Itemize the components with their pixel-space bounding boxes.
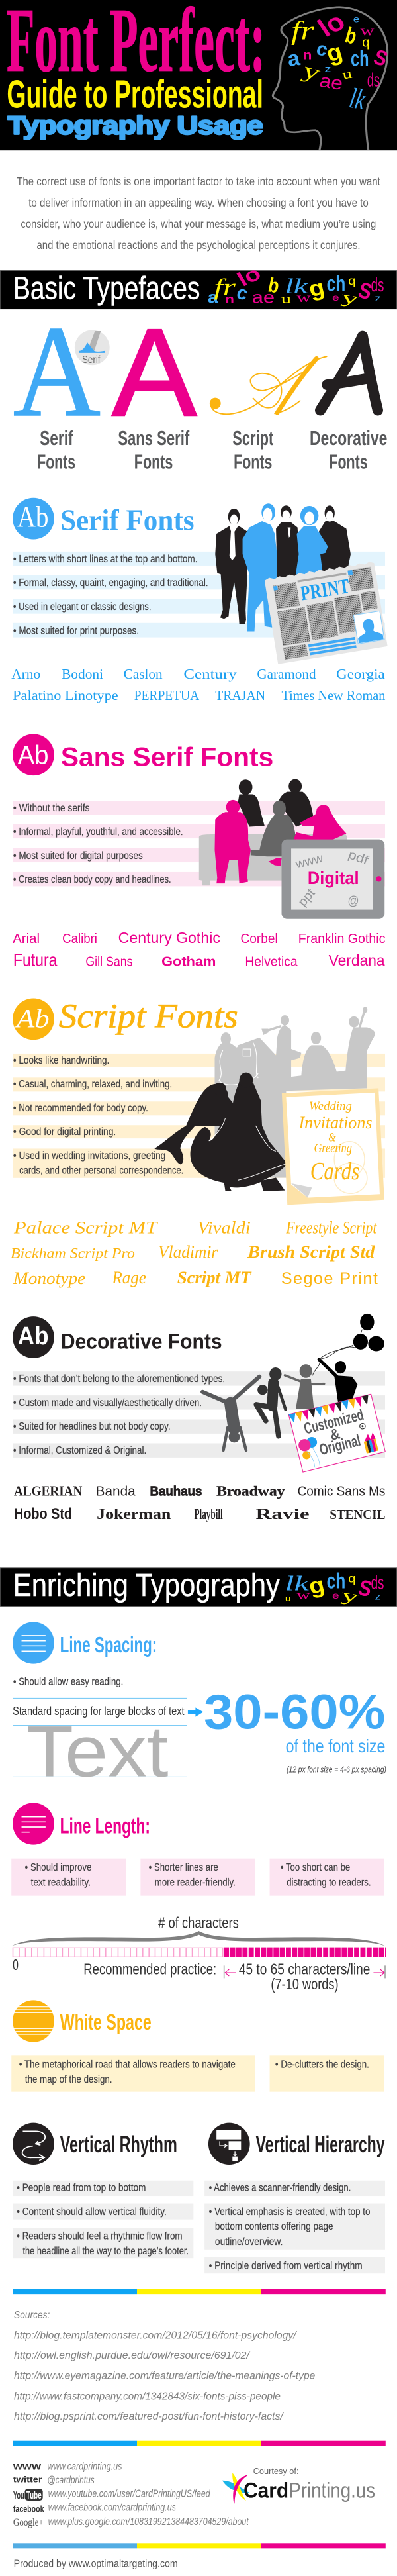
sources list: http://blog.psprint.com/featured-post/fun-font-history-facts/ [14,2410,284,2422]
social links: www.cardprinting.us [48,2461,122,2472]
heading bar: Enriching Typography: w [296,1587,310,1603]
list: vertical hierarchy notes: • Achieves a scanner-friendly design. [209,2181,351,2193]
icon: script Ab badge [13,999,54,1040]
illustration: customized and original card: Customized [302,1407,365,1438]
illustration: children silhouettes and balloons [202,1314,384,1450]
font list: decorative: Banda [96,1484,136,1499]
illustration: print newspaper: PRINT [298,574,351,605]
icon: vertical rhythm [13,2123,54,2165]
font list: script: Vladimir [158,1242,218,1262]
icon: head outline with letters [273,7,391,150]
list: vertical rhythm notes: • Content should allow vertical fluidity. [17,2206,167,2218]
font list: serif: Bodoni [62,666,103,682]
icon: head outline with letters: q [362,34,370,50]
bullet list: sans serif: • Most suited for digital purposes [13,850,143,862]
heading bar: Basic Typefaces: c [234,282,250,305]
panel: serif fonts [11,498,388,703]
font list: sans serif: Corbel [241,931,278,946]
callouts: line length notes [11,1859,384,1896]
list: vertical rhythm notes: • Readers should feel a rhythmic flow from [17,2230,183,2242]
heading bar: Basic Typefaces: q [348,274,356,287]
font list: serif: TRAJAN [215,687,265,703]
heading bar: Basic Typefaces: w [296,290,311,305]
labels under samples: Fonts [329,450,368,473]
illustration: digital tablet: pdf [346,848,371,868]
social links: www.facebook.com/cardprinting.us [48,2502,176,2514]
font list: sans serif: Arial [13,931,40,946]
bullet list: serif: • Most suited for print purposes. [13,624,139,636]
icon: head outline with letters: g [324,38,345,67]
font list: script: Freestyle Script [286,1218,377,1238]
font list: serif [11,666,386,703]
panel: line length details and white space [11,1859,386,2165]
heading: Decorative Fonts: Decorative Fonts [61,1330,222,1354]
icon: decorative Ab badge [13,1316,54,1358]
panel: script font list and decorative fonts [11,1218,385,1523]
labels under samples: Script [232,427,273,450]
heading bar: Basic Typefaces: g [306,275,327,302]
font list: script: Monotype [13,1268,85,1288]
labels under samples: Serif [40,427,73,450]
sources list: http://blog.templatemonster.com/2012/05/16/font-psychology/ [14,2330,297,2342]
illustration: digital tablet [282,840,384,919]
callouts: white space notes: the map of the design. [25,2073,112,2085]
font list: sans serif: Verdana [329,952,385,969]
font list: script [11,1218,378,1288]
font list: sans serif: Calibri [62,931,97,946]
illustration: customized and original card: Original [318,1432,363,1459]
font list: sans serif: Gotham [161,954,216,969]
heading: Line Length: Line Length: [60,1814,150,1838]
illustration: customized and original card: & [328,1424,341,1444]
heading bar: Enriching Typography: ch [327,1569,345,1593]
font list: serif: PERPETUA [134,687,200,703]
social links: www [13,2461,41,2472]
bullet list: serif: • Formal, classy, quaint, engaging, and traditional. [13,577,208,589]
labels under samples [37,427,387,473]
labels under samples: Sans Serif [118,427,190,450]
logo: CardPrinting.us: Courtesy of: [253,2466,299,2476]
social links: www.youtube.com/user/CardPrintingUS/feed [48,2489,210,2500]
illustration: people on couch [199,779,347,885]
illustration: digital tablet: Digital [308,868,359,888]
sources list [14,2309,315,2422]
social links: You [13,2489,24,2502]
icon: head outline with letters: S [371,45,391,71]
callouts: white space notes: • The metaphorical road that allows readers to navigate [19,2058,236,2070]
heading bar: Basic Typefaces: S [355,277,375,305]
bullet list: script [13,1054,385,1178]
illustration: wedding invitation card: Invitations [298,1113,372,1132]
heading bar: Enriching Typography: g [306,1572,327,1599]
bullet list: script: • Used in wedding invitations, greeting [13,1150,165,1162]
icon: head outline with letters: y [300,58,324,85]
sources list: http://www.fastcompany.com/1342843/six-fonts-piss-people [14,2390,281,2402]
heading bar: Basic Typefaces: z [375,293,381,304]
font list: script: Rage [112,1267,146,1287]
heading bar: Basic Typefaces: fr [214,274,236,300]
diagram: line spacing sample: Text [26,1711,169,1793]
labels under samples: Fonts [134,450,173,473]
heading bar: Enriching Typography: q [348,1572,356,1585]
icon: head outline with letters: e [353,14,359,25]
heading bar: Enriching Typography: e [332,1591,339,1601]
font list: sans serif: Helvetica [245,954,298,969]
bullet list: sans serif [13,801,385,886]
heading bar: Enriching Typography: z [375,1591,381,1602]
illustration: dancing couple [154,1073,287,1191]
bullet list: script: cards, and other personal correspondence. [19,1164,183,1176]
subtitle: Typography Usage: Typography Usage [7,111,263,140]
font list: decorative: Comic Sans Ms [298,1484,385,1499]
heading bar: Enriching Typography: S [355,1575,375,1602]
icon: vertical hierarchy [208,2123,250,2165]
icon: head outline with letters: c [314,38,330,60]
list: vertical rhythm notes [13,2181,193,2258]
bullet list: sans serif: • Informal, playful, youthful, and accessible. [13,826,183,838]
icon: head outline with letters: z [325,64,331,74]
tricolor divider [13,2289,386,2294]
bullet list: serif [13,552,385,638]
icon: head outline with letters: ch [351,46,369,71]
font list: serif: Arno [11,666,40,682]
heading bar: Basic Typefaces: u [281,293,291,306]
font list: decorative: Bauhaus [150,1484,202,1499]
arrow [188,1707,203,1717]
illustration: digital tablet: ppt [296,886,318,909]
heading bar: Enriching Typography: u [285,1593,292,1603]
font list: serif: Georgia [336,666,385,682]
intro paragraph [17,175,380,252]
bullet list: sans serif: • Without the serifs [13,802,89,814]
heading bar: Enriching Typography: y [340,1585,361,1607]
social links: Tube [26,2489,42,2501]
panel: enriching typography [0,1567,397,1845]
panel: sans serif fonts and script fonts [13,734,385,1205]
icon: head outline with letters: b [343,23,359,49]
heading: Serif Fonts: Serif Fonts [60,503,194,536]
illustration: digital tablet: @ [347,895,359,909]
heading bar: Enriching Typography: lk [285,1573,310,1595]
font list: script: Palace Script MT [13,1218,159,1238]
callouts: line length notes: text readability. [31,1875,91,1888]
font list: script: Vivaldi [197,1218,251,1238]
bullet list: sans serif: • Creates clean body copy and headlines. [13,873,171,885]
bullet list: decorative: • Suited for headlines but not body copy. [13,1420,171,1432]
heading bar: Basic Typefaces: ds [371,275,384,295]
bullet list: script: • Good for digital printing. [13,1126,116,1138]
heading bar: Basic Typefaces: ae [252,288,275,307]
statistic: 30-60 percent: 30-60% [204,1685,385,1739]
font list: script: Brush Script Std [247,1242,375,1262]
list: vertical hierarchy notes: • Principle derived from vertical rhythm [209,2259,363,2271]
callouts: line length notes: • Shorter lines are [149,1861,218,1873]
icon: head outline with letters: w [361,23,375,39]
font list: decorative: Ravie [255,1506,310,1523]
callouts: white space notes [11,2055,384,2092]
font list: serif: Times New Roman [282,687,386,703]
font list: sans serif: Futura [13,950,58,970]
font list: serif: Century [183,666,237,682]
credit line: Produced by www.optimaltargeting.com [14,2558,178,2570]
icon: white space [13,2000,54,2042]
labels under samples: Fonts [37,450,75,473]
heading: Vertical Rhythm: Vertical Rhythm [60,2131,177,2157]
icon: head outline with letters: ae [318,70,345,94]
heading bar: Basic Typefaces: y [340,287,361,309]
bullet list: decorative: • Custom made and visually/aesthetically driven. [13,1397,202,1409]
social links: www.plus.google.com/108319921384483704529/about [48,2516,249,2528]
heading bar: Basic Typefaces: n [226,293,234,305]
sources list: Sources: [14,2309,50,2321]
list: vertical hierarchy notes: • Vertical emphasis is created, with top to [209,2206,370,2218]
bullet list: serif: • Used in elegant or classic designs. [13,601,151,613]
font list: script: Bickham Script Pro [11,1245,135,1262]
font list: decorative: Hobo Std [14,1506,72,1523]
header banner [0,0,397,309]
logo: CardPrinting.us [222,2466,375,2503]
list: vertical hierarchy notes: outline/overview. [215,2236,283,2248]
icon: line length [13,1803,54,1845]
illustration: wedding invitation card: & [328,1131,336,1145]
social links [13,2461,249,2528]
bullet list: script: • Not recommended for body copy. [13,1102,148,1114]
chart: characters per line scale: Recommended practice: [83,1961,216,1978]
font list: decorative: Jokerman [97,1506,171,1523]
heading bar: Basic Typefaces: ch [327,272,345,296]
icon: sans Ab badge: Ab [18,740,48,770]
list: vertical rhythm notes: • People read from top to bottom [17,2181,146,2193]
heading: Sans Serif Fonts: Sans Serif Fonts [61,742,273,772]
heading bar: Enriching Typography: ds [371,1572,384,1593]
panel: vertical rhythm and hierarchy notes, sources, footer [13,2181,386,2570]
font list: sans serif: Century Gothic [118,929,220,946]
icon: head outline with letters: ds [367,70,380,91]
icon: serif callout [75,330,110,366]
tricolor divider [13,2441,386,2446]
font list: script: Script MT [177,1267,252,1287]
heading: White Space: White Space [60,2010,152,2034]
font list: serif: Palatino Linotype [13,687,118,703]
statistic: 30-60 percent [204,1685,386,1775]
sources list: http://owl.english.purdue.edu/owl/resource/691/02/ [14,2350,250,2361]
heading bar: Basic Typefaces: a [208,288,219,307]
icon: script letter A [210,356,327,414]
font list: decorative: STENCIL [330,1508,385,1522]
illustration: customized and original card [288,1394,385,1472]
icon: sans serif letter A: A [112,303,197,442]
icon: script Ab badge: Ab [15,1004,50,1034]
illustration: wedding invitation card [282,1088,384,1205]
social links: @cardprintus [48,2475,95,2486]
icon: head outline with letters: n [303,48,312,62]
chart: characters per line scale: 0 [13,1957,19,1974]
icon: line spacing [13,1622,54,1664]
heading bar: Basic Typefaces: Basic Typefaces [13,271,200,307]
sources list: http://www.eyemagazine.com/feature/article/the-meanings-of-type [14,2370,315,2382]
bullet list: serif: • Letters with short lines at the top and bottom. [13,553,197,565]
icon: serif callout: Serif [82,354,101,366]
bullet list: script: • Casual, charming, relaxed, and inviting. [13,1078,172,1090]
heading bar: Basic Typefaces: lk [285,275,308,298]
chart: characters per line scale: # of characters [158,1915,239,1932]
icon: head outline with letters: u [341,66,353,82]
heading bar: Basic Typefaces [0,262,397,309]
callouts: line length notes: • Should improve [24,1861,92,1873]
icon: head outline with letters: lo [312,7,351,42]
icon: head outline with letters: fr [291,17,314,46]
icon: serif Ab badge: Ab [17,500,48,533]
social links: facebook [13,2504,44,2514]
font list: decorative: Playbill [194,1506,223,1523]
icon: serif letter A: A [13,299,101,444]
callouts: line length notes: more reader-friendly. [155,1875,236,1888]
list: vertical hierarchy notes [204,2181,385,2273]
heading bar: Basic Typefaces: e [332,293,339,303]
bullet list: decorative: • Informal, Customized & Original. [13,1444,146,1456]
icon: decorative Ab badge: Ab [18,1322,48,1350]
illustration: wedding invitation card: Wedding [309,1099,352,1113]
callouts: line length notes: • Too short can be [281,1861,350,1873]
font list: serif: Garamond [257,666,316,682]
logo: CardPrinting.us: Printing.us [288,2478,375,2502]
bullet: easy reading: • Should allow easy reading. [13,1675,123,1687]
font list: decorative: Broadway [216,1485,285,1499]
font list: script: Segoe Print [281,1269,378,1288]
illustration: business people silhouettes [215,503,351,631]
illustration: wedding invitation card: Greeting [314,1141,352,1156]
icon: head outline with letters: lk [347,82,369,116]
illustration: print newspaper [264,561,388,664]
icon: decorative letter A [320,336,378,410]
tricolor divider [13,2543,386,2548]
font list: decorative: ALGERIAN [14,1485,82,1499]
panel: four typeface samples [11,299,388,703]
chart: characters per line scale [12,1915,386,1993]
heading: Line Spacing: Line Spacing: [60,1632,157,1657]
illustration: jazz band silhouettes [214,1007,375,1177]
list: vertical rhythm notes: the headline all the way to the page’s footer. [22,2245,189,2257]
bullet list: decorative: • Fonts that don’t belong to the aforementioned types. [13,1373,225,1385]
icon: sans Ab badge [13,734,54,775]
font list: sans serif: Franklin Gothic [298,931,385,946]
font list: sans serif: Gill Sans [85,954,133,969]
icon: head outline with letters: a [286,46,302,71]
social links: Google+ [13,2517,44,2528]
heading: Script Fonts: Script Fonts [59,998,238,1036]
diagram: line spacing sample: Standard spacing for large blocks of text [13,1705,185,1718]
bullet list: script: • Looks like handwriting. [13,1054,109,1066]
font list: sans serif [13,929,385,970]
heading bar: Basic Typefaces: b [266,273,281,297]
illustration: wedding invitation card: Cards [310,1158,359,1185]
social links: twitter [13,2474,42,2484]
heading bar: Basic Typefaces: lo [233,262,265,291]
logo: CardPrinting.us: Card [243,2478,288,2502]
heading bar: Enriching Typography: Enriching Typography [13,1567,280,1603]
labels under samples: Fonts [234,450,272,473]
list: vertical hierarchy notes: bottom contents offering page [215,2220,333,2232]
font list: decorative [14,1484,385,1523]
font list: serif: Caslon [124,666,163,682]
bullet list: decorative [13,1371,385,1458]
illustration: digital tablet: www [294,851,325,871]
chart: characters per line scale: (7-10 words) [271,1976,339,1993]
